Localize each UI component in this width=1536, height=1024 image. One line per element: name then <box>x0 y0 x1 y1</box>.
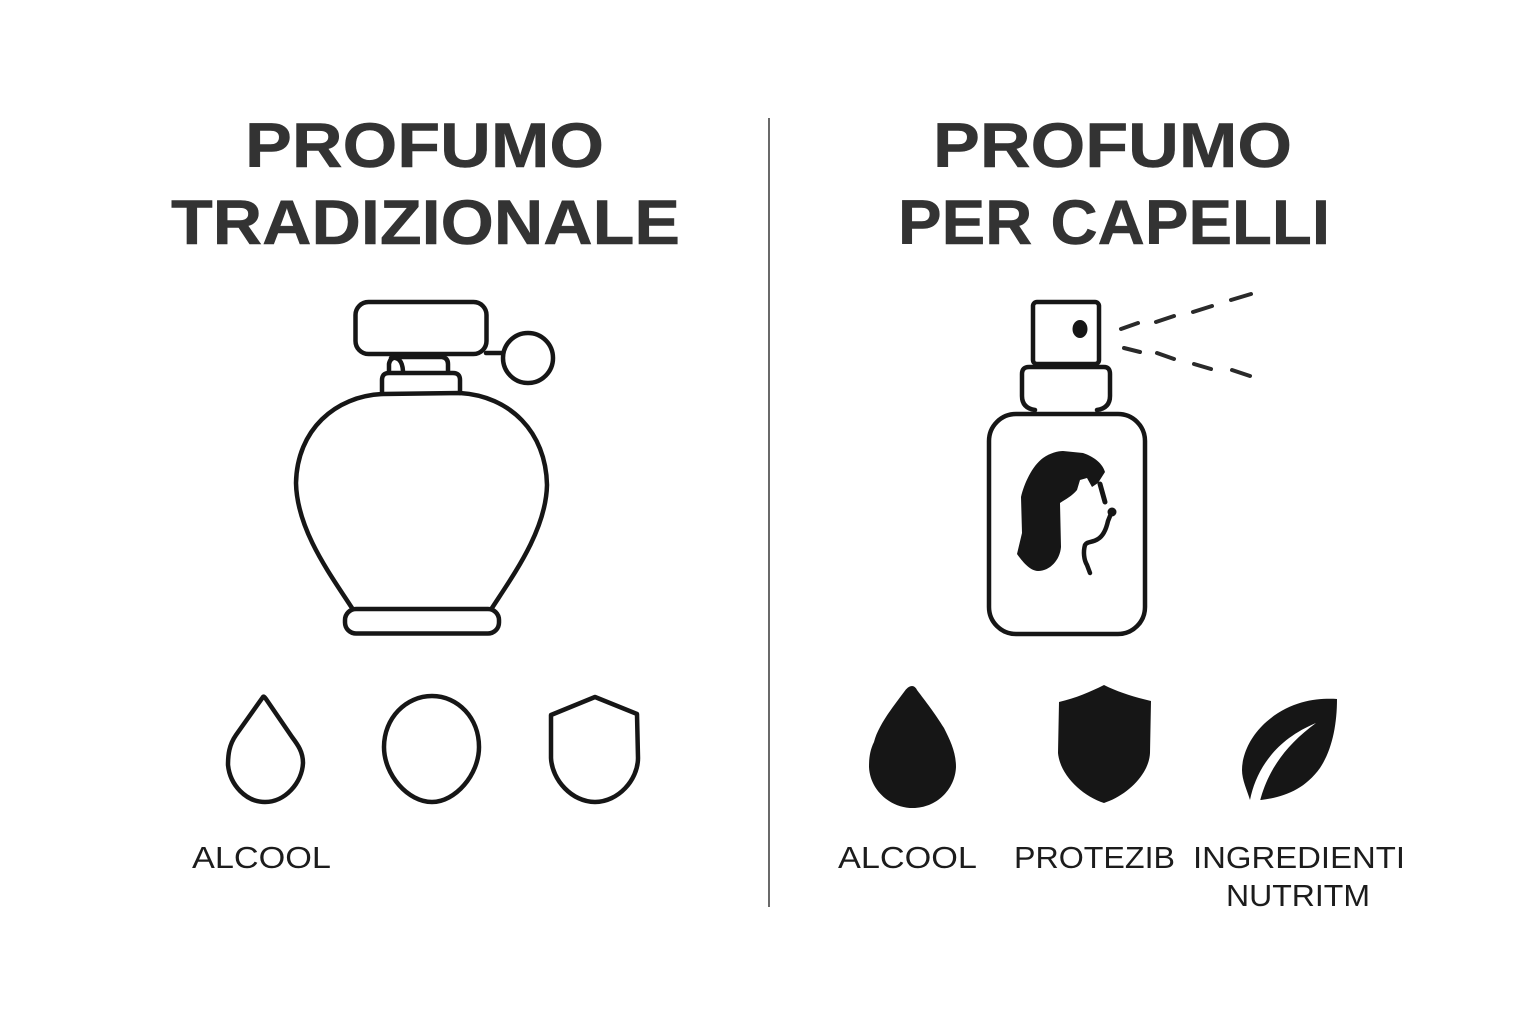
heading: hair perfume <box>898 111 1330 258</box>
icon: solid drop <box>869 686 956 808</box>
panel: hair perfume <box>838 111 1405 913</box>
label: nourishing ingredients: NUTRITM <box>1226 878 1370 913</box>
icon: atomizer perfume bottle <box>296 302 553 634</box>
icon: hair spray bottle <box>989 302 1145 634</box>
heading: hair perfume: PROFUMO <box>933 111 1292 181</box>
heading: hair perfume: PER CAPELLI <box>898 188 1330 258</box>
icon: outlined shield <box>551 697 638 802</box>
icon: outlined circle <box>384 696 479 802</box>
label: protection: PROTEZIB <box>1014 840 1175 875</box>
icon: outlined drop <box>228 697 303 802</box>
label: alcohol: ALCOOL <box>192 840 331 875</box>
icon: spray mist dashes <box>1121 294 1251 376</box>
label: nourishing ingredients <box>1193 840 1405 913</box>
heading: traditional perfume: PROFUMO <box>245 111 604 181</box>
panel: traditional perfume <box>171 111 680 875</box>
label: nourishing ingredients: INGREDIENTI <box>1193 840 1405 875</box>
label: alcohol: ALCOOL <box>838 840 977 875</box>
icon: solid leaf <box>1242 699 1337 801</box>
heading: traditional perfume <box>171 111 680 258</box>
icon: solid shield <box>1058 685 1151 803</box>
heading: traditional perfume: TRADIZIONALE <box>171 188 680 258</box>
